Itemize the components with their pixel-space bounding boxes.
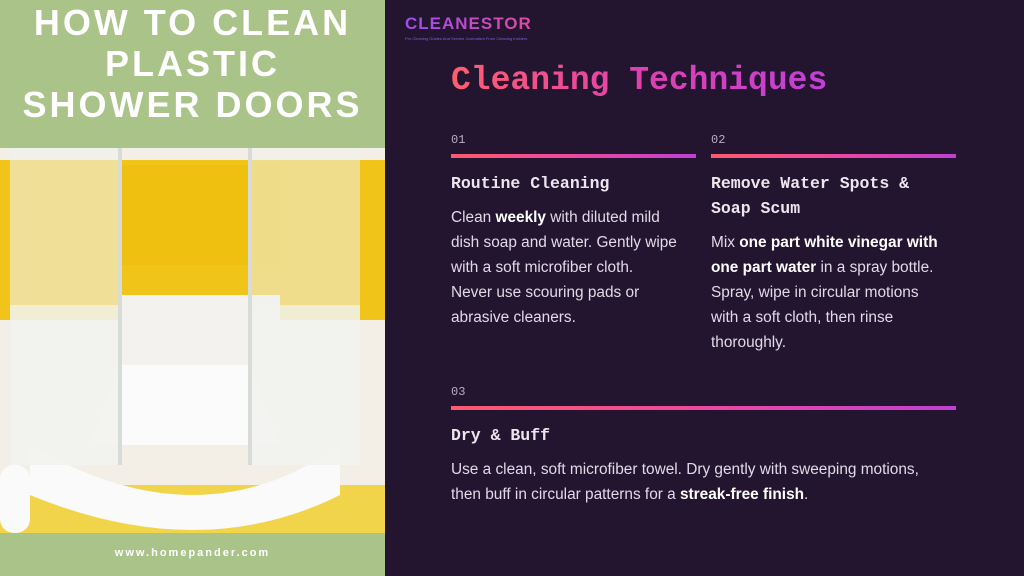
card 03 <box>451 385 956 503</box>
panel: left <box>0 0 385 576</box>
text: Remove Water Spots & Soap Scum <box>711 174 909 218</box>
text: 02 <box>711 133 725 147</box>
title: SHOWER DOORS <box>22 84 362 125</box>
heading: Cleaning Techniques <box>451 62 827 99</box>
text: Clean weekly with diluted mild <box>451 209 660 226</box>
text: with a soft microfiber cloth. <box>451 259 633 276</box>
text: one part water in a spray bottle. <box>711 259 933 276</box>
card 02 <box>711 133 956 351</box>
footer url: www.homepander.com <box>115 547 270 559</box>
text: Mix one part white vinegar with <box>711 234 938 251</box>
photo: shower <box>0 148 385 533</box>
text: Dry & Buff <box>451 426 550 445</box>
text: abrasive cleaners. <box>451 309 576 326</box>
text: Routine Cleaning <box>451 174 609 193</box>
text: 03 <box>451 385 465 399</box>
card 01 <box>451 133 696 326</box>
text: dish soap and water. Gently wipe <box>451 234 677 251</box>
logo: CLEANESTOR <box>405 14 532 33</box>
title: HOW TO CLEAN <box>34 2 351 43</box>
logo: Pro Cleaning Guides And Service Journalism From Cleaning Insiders <box>405 36 527 41</box>
text: Never use scouring pads or <box>451 284 639 301</box>
text: 01 <box>451 133 465 147</box>
text: then buff in circular patterns for a streak-free finish. <box>451 486 808 503</box>
title: PLASTIC <box>105 43 280 84</box>
text: Use a clean, soft microfiber towel. Dry gently with sweeping motions, <box>451 461 919 478</box>
text: thoroughly. <box>711 334 786 351</box>
text: Spray, wipe in circular motions <box>711 284 919 301</box>
text: with a soft cloth, then rinse <box>711 309 893 326</box>
title <box>22 2 362 125</box>
